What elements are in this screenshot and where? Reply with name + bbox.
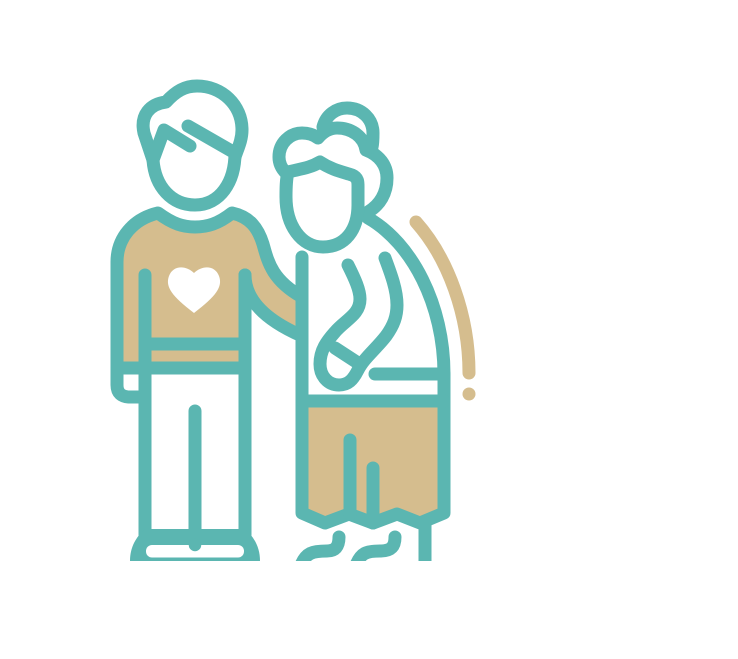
woman: hair (279, 128, 387, 212)
man: face (153, 126, 235, 205)
woman: cuff (335, 348, 358, 363)
man: hair (143, 86, 242, 160)
man: sweater outline and arm (117, 213, 302, 397)
woman: skirt folds (350, 440, 425, 565)
illustration: young man supporting elderly woman (110, 80, 476, 561)
woman: body outline (302, 218, 444, 523)
man: shoe opening (146, 545, 244, 558)
woman: face (286, 162, 358, 247)
man: shoes (130, 529, 260, 561)
woman: arm and hand (320, 258, 397, 385)
figure group (117, 86, 476, 565)
motion curve (416, 222, 469, 373)
woman: bun (323, 108, 373, 147)
woman: feet (301, 537, 395, 565)
man: torso and legs (117, 275, 245, 545)
man: sweater fill (124, 220, 296, 362)
man: heart (168, 267, 220, 313)
woman: skirt fill (308, 408, 438, 516)
man: centre leg end (188, 545, 202, 552)
man: under arm line (245, 275, 302, 336)
motion dot (462, 388, 476, 400)
woman: waist line (302, 374, 444, 401)
